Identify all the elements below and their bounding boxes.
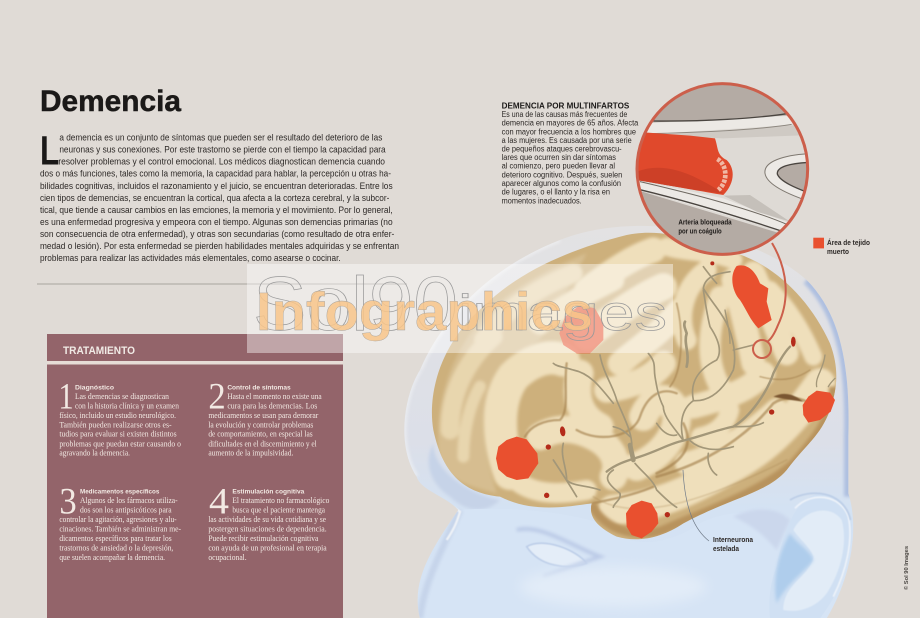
step 3: medicamentos específicos: dos son los antipsicóticos para: [80, 506, 172, 515]
dead tissue areas: [496, 261, 835, 538]
label: blocked artery: por un coágulo: [678, 226, 722, 235]
label: blocked artery: Arteria bloqueada: [678, 218, 732, 227]
text block: demencia por multinfartos: a las mujeres. Es causada por una serie: [502, 136, 632, 145]
step 4: estimulación cognitiva: ocupacional.: [208, 553, 247, 562]
legend: dead tissue: Área de tejido: [827, 238, 870, 247]
brain: [432, 233, 836, 539]
step 3: medicamentos específicos: Algunos de los fármacos utiliza-: [80, 496, 178, 505]
step 3: medicamentos específicos: [59, 481, 181, 562]
panel header: [47, 334, 343, 361]
step 3: medicamentos específicos: Medicamentos específicos: [80, 489, 160, 496]
text block: demencia por multinfartos: momentos inadecuados.: [502, 196, 582, 205]
text block: demencia por multinfartos: DEMENCIA POR MULTINFARTOS: [502, 101, 630, 111]
intro paragraph: son consecuencia de otra enfermedad), y otras son secundarias (como resultado de otra enfer-: [40, 229, 394, 239]
intro paragraph: tical, que tiende a causar cambios en las emciones, la memoria y el movimiento. Por lo general,: [40, 205, 393, 215]
step 3: medicamentos específicos: dicamentos específicos para tratar los: [59, 534, 172, 543]
intro paragraph: medad o lesión). Por esta enfermedad se pierden habilidades mentales adquiridas y se enfrentan: [40, 241, 399, 251]
step 2: control de síntomas: de comportamiento, en especial las: [208, 430, 313, 439]
intro paragraph: [40, 127, 399, 263]
text block: demencia por multinfartos: [502, 101, 639, 205]
step 2: control de síntomas: Control de síntomas: [227, 384, 291, 391]
step 1: diagnóstico: 1: [58, 376, 74, 417]
step 1: diagnóstico: agravando la demencia.: [59, 449, 130, 458]
gyri: [500, 247, 820, 510]
text block: demencia por multinfartos: Es una de las causas más frecuentes de: [502, 110, 628, 119]
intro paragraph: problemas para realizar las actividades más elementales, como asearse o cocinar.: [40, 253, 341, 263]
intro paragraph: dos o más funciones, tales como la memoria, la capacidad para hablar, la percepción u otras ha-: [40, 169, 391, 179]
step 4: estimulación cognitiva: con ayuda de un profesional en terapia: [208, 544, 327, 553]
step 3: medicamentos específicos: 3: [59, 481, 77, 522]
intro paragraph: cien tipos de demencias, se encuentran la cortical, qua afecta a la corteza cerebral, y la subcor-: [40, 193, 389, 203]
step 3: medicamentos específicos: cinaciones. También se administran me-: [59, 525, 181, 534]
text block: demencia por multinfartos: con mayor frecuencia a los hombres que: [502, 127, 637, 136]
step 3: medicamentos específicos: controlar la agitación, agresiones y alu-: [59, 515, 177, 524]
label: interneurona estelada: Interneurona: [713, 535, 754, 544]
watermark: Infographics: [256, 282, 593, 342]
step 4: estimulación cognitiva: busca que el paciente mantenga: [232, 506, 325, 515]
step 4: estimulación cognitiva: Puede recibir estimulación cognitiva: [208, 534, 319, 543]
step 1: diagnóstico: Las demencias se diagnostican: [75, 392, 169, 401]
step 1: diagnóstico: tudios para evaluar si existen distintos: [59, 430, 177, 439]
drop cap: L: [40, 127, 59, 173]
step 4: estimulación cognitiva: El tratamiento no farmacológico: [232, 496, 329, 505]
step 4: estimulación cognitiva: Estimulación cognitiva: [232, 489, 305, 496]
intro paragraph: resolver problemas y el control emocional. Los médicos diagnostican demencia cuando: [58, 157, 385, 167]
magnifier: blocked artery: [633, 82, 810, 262]
watermark: [247, 262, 673, 353]
intro paragraph: neuronas y sus conexiones. Por este trastorno se pierde con el tiempo la capacidad para: [59, 145, 386, 155]
step 2: control de síntomas: Hasta el momento no existe una: [227, 392, 322, 401]
arteries: [553, 267, 835, 507]
step 1: diagnóstico: físico, incluido un estudio neurológico.: [59, 411, 176, 420]
watermark: images: [458, 285, 667, 341]
step 2: control de síntomas: [208, 376, 322, 458]
step 3: medicamentos específicos: que suelen acompañar la demencia.: [59, 553, 165, 562]
step 4: estimulación cognitiva: [208, 481, 329, 562]
step 4: estimulación cognitiva: postergen situaciones de dependencia.: [208, 525, 327, 534]
step 1: diagnóstico: [58, 376, 181, 458]
connector line from small circle to magnifier: [753, 243, 786, 358]
lower shadow: [592, 387, 833, 533]
step 1: diagnóstico: Diagnóstico: [75, 384, 114, 391]
head and brain illustration: [404, 226, 853, 618]
copyright credit: © Sol 90 Images: [903, 546, 910, 590]
title: Demencia: [40, 85, 181, 118]
intro paragraph: es una enfermedad progresiva y empeora con el tiempo. Algunas son demencias primarias (no: [40, 217, 393, 227]
label: interneurona estelada: estelada: [713, 544, 740, 553]
intro paragraph: a demencia es un conjunto de síntomas que pueden ser el resultado del deterioro de las: [59, 133, 383, 143]
text block: demencia por multinfartos: demencia en mayores de 65 años. Afecta: [502, 119, 639, 128]
text block: demencia por multinfartos: deterioro cognitivo. Después, suelen: [502, 170, 622, 179]
label: interneurona estelada: [683, 470, 754, 553]
treatment steps: [58, 376, 329, 562]
panel body: [47, 364, 343, 618]
step 2: control de síntomas: cura para las demencias. Los: [227, 402, 317, 411]
text block: demencia por multinfartos: lares que ocurren sin dar síntomas: [502, 153, 616, 162]
step 4: estimulación cognitiva: las actividades de su vida cotidiana y se: [208, 515, 326, 524]
text block: demencia por multinfartos: de lugares, o el llanto y la risa en: [502, 188, 610, 197]
text block: demencia por multinfartos: al comienzo, pero pueden llevar al: [502, 162, 615, 171]
head silhouette: [404, 226, 853, 618]
legend: dead tissue: [813, 238, 870, 256]
label: blocked artery: [678, 218, 732, 235]
step 1: diagnóstico: con la historia clínica y un examen: [75, 402, 179, 411]
step 2: control de síntomas: 2: [208, 376, 226, 417]
legend: dead tissue: muerto: [827, 247, 849, 256]
step 1: diagnóstico: problemas que puedan estar causando o: [59, 439, 181, 448]
sulci: [525, 303, 810, 509]
ear: [769, 493, 852, 618]
step 1: diagnóstico: También pueden realizarse otros es-: [59, 420, 172, 429]
step 2: control de síntomas: dificultades en el discernimiento y el: [208, 439, 317, 448]
step 4: estimulación cognitiva: 4: [209, 481, 229, 522]
text block: demencia por multinfartos: aparecer algunos como la confusión: [502, 179, 621, 188]
step 2: control de síntomas: aumento de la impulsividad.: [208, 449, 293, 458]
step 2: control de síntomas: medicamentos se usan para demorar: [208, 411, 319, 420]
text block: demencia por multinfartos: de pequeños ataques cerebrovascu-: [502, 145, 622, 154]
intro paragraph: bilidades cognitivas, incluidos el razonamiento y el juicio, se encuentran deterioradas. Entre los: [40, 181, 393, 191]
panel: tratamiento: [47, 334, 343, 618]
step 3: medicamentos específicos: trastornos de ansiedad o la depresión,: [59, 544, 173, 553]
watermark: Sol90: [253, 262, 458, 347]
panel header: TRATAMIENTO: [63, 345, 135, 357]
far hemisphere: [438, 253, 587, 493]
step 2: control de síntomas: la evolución y controlar problemas: [208, 420, 313, 429]
